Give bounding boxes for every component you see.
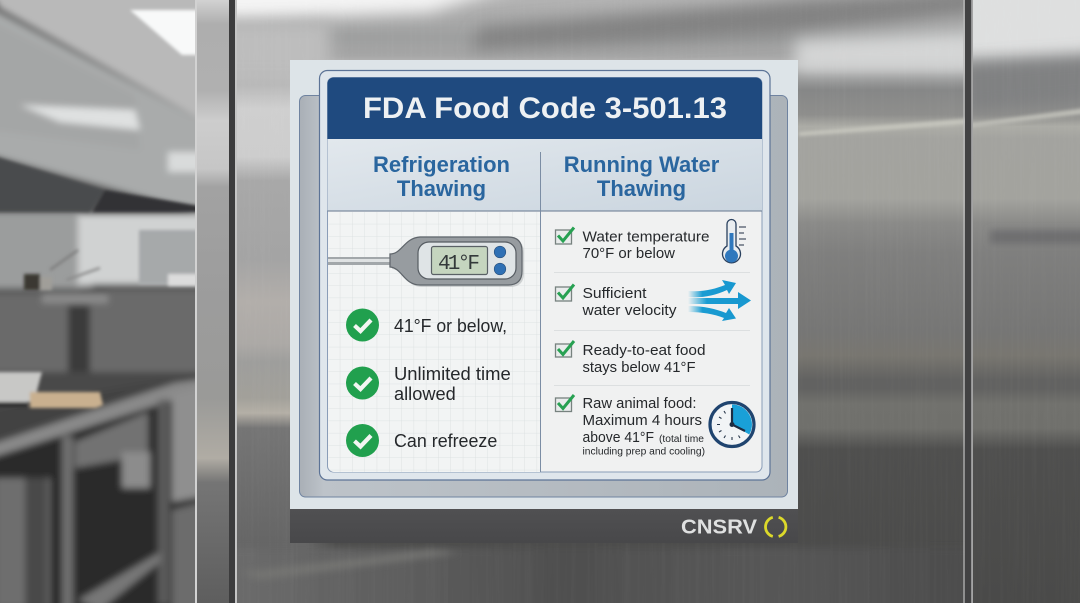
item: raw animal food: including prep and cooling) bbox=[582, 446, 705, 458]
item: 41F or below bbox=[346, 308, 507, 342]
kitchen background bbox=[0, 0, 212, 603]
sign bbox=[290, 60, 798, 543]
icon: thermometer bbox=[723, 220, 746, 263]
logo ring bbox=[766, 517, 786, 536]
item: unlimited time: allowed bbox=[394, 384, 456, 404]
item: can refreeze bbox=[346, 424, 497, 457]
item: ready-to-eat: Ready-to-eat food bbox=[582, 342, 706, 359]
left door stile bbox=[195, 0, 237, 603]
item: water velocity bbox=[556, 284, 677, 319]
heading: refrigeration thawing: Thawing bbox=[397, 176, 486, 201]
footer band bbox=[290, 509, 798, 543]
item: ready-to-eat bbox=[556, 341, 706, 376]
left panel grid bbox=[328, 212, 540, 472]
item: water velocity: water velocity bbox=[581, 302, 677, 319]
heading: refrigeration thawing: Refrigeration bbox=[373, 152, 510, 177]
icon: digital thermometer bbox=[328, 237, 524, 287]
logo bbox=[681, 516, 786, 538]
item: water temperature: Water temperature bbox=[582, 228, 710, 246]
item: raw animal food: (total time bbox=[659, 434, 704, 445]
item: raw animal food: above 41°F bbox=[582, 429, 654, 446]
icon: digital thermometer: 41°F bbox=[438, 253, 480, 276]
heading: running water thawing: Running Water bbox=[564, 152, 720, 177]
item: unlimited time bbox=[346, 364, 511, 404]
back panel bbox=[300, 96, 788, 497]
item: can refreeze: Can refreeze bbox=[394, 431, 497, 451]
item: water temperature bbox=[556, 228, 710, 262]
title banner bbox=[328, 78, 762, 139]
icon: clock bbox=[710, 402, 754, 446]
refrigeration list bbox=[346, 308, 511, 457]
item: water velocity: Sufficient bbox=[582, 285, 647, 302]
front panel bbox=[320, 70, 770, 480]
heading: running water thawing bbox=[564, 152, 720, 201]
column headers background bbox=[328, 139, 762, 211]
heading: running water thawing: Thawing bbox=[597, 176, 686, 201]
title: FDA Food Code 3-501.13 bbox=[363, 92, 727, 125]
content card bbox=[328, 78, 762, 472]
icon: water flow arrows bbox=[688, 280, 751, 321]
item: 41F or below: 41°F or below, bbox=[394, 316, 507, 336]
item: raw animal food: Raw animal food: bbox=[582, 395, 696, 412]
heading: refrigeration thawing bbox=[373, 152, 510, 201]
item: raw animal food bbox=[556, 395, 705, 458]
item: ready-to-eat: stays below 41°F bbox=[582, 359, 696, 376]
item: water temperature: 70°F or below bbox=[582, 245, 675, 262]
logo: CNSRV bbox=[681, 516, 757, 538]
right door bbox=[973, 0, 1080, 603]
item: unlimited time: Unlimited time bbox=[394, 364, 511, 384]
main stainless door bbox=[200, 0, 1000, 603]
item: raw animal food: Maximum 4 hours bbox=[582, 412, 702, 429]
